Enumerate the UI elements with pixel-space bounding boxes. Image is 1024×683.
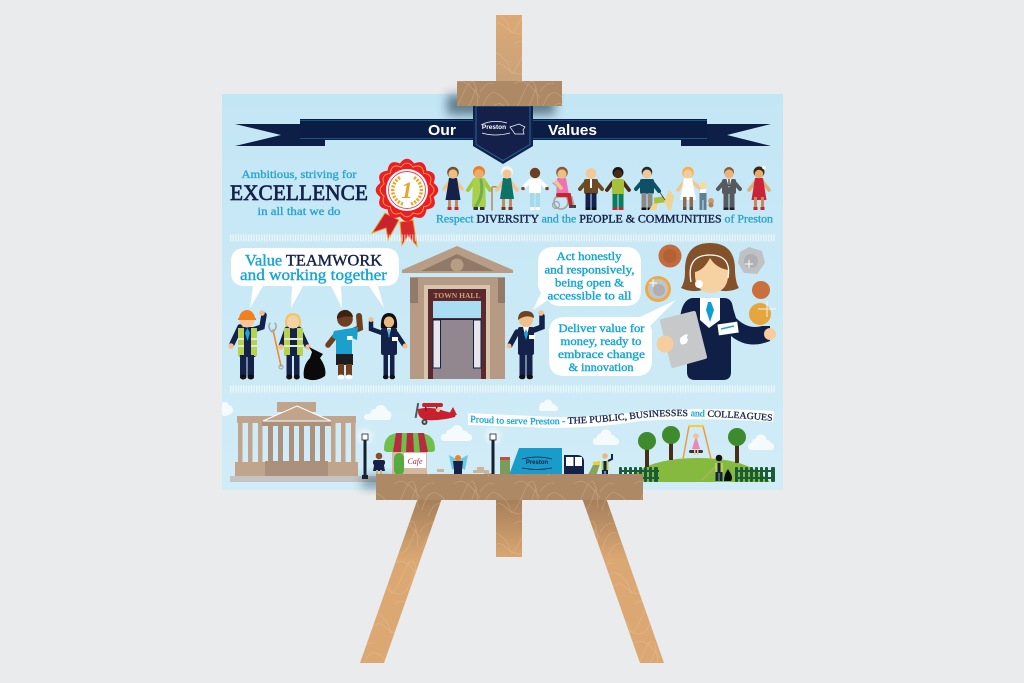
woman hand on tablet <box>656 336 674 352</box>
poster board <box>222 94 783 490</box>
banner main band <box>300 119 707 140</box>
bottom scene <box>222 400 775 482</box>
cafe shop: Cafe <box>407 457 423 466</box>
banner right tail <box>681 124 771 146</box>
park worker with bag <box>702 455 732 481</box>
easel top crossbar <box>457 81 562 106</box>
woman face <box>695 258 728 293</box>
easel: right leg <box>582 498 664 663</box>
bubble text line 2: and working together <box>240 267 388 284</box>
coin: copper small <box>752 281 770 299</box>
coin: copper large <box>658 244 682 268</box>
person: woman in green sari <box>468 166 490 210</box>
town hall sign: TOWN HALL <box>434 292 481 300</box>
person: blonde woman and child <box>678 167 714 210</box>
bubble shape <box>549 300 676 376</box>
flying ribbon: Proud to serve Preston - THE PUBLIC, BUSINESSES and COLLEAGUES <box>470 410 772 424</box>
banner word Values: Values <box>548 122 597 139</box>
banner heading: Our Values <box>235 106 771 164</box>
worker: hard hat man <box>228 310 265 380</box>
banner shield: Preston <box>482 124 506 131</box>
woman hair <box>681 243 739 291</box>
person: woman in red dress <box>749 166 769 210</box>
park hill <box>624 458 770 482</box>
speech bubble: value for money <box>549 300 676 376</box>
easel shelf <box>376 474 643 500</box>
person: woman in wheelchair <box>552 167 576 209</box>
bubble shape <box>231 248 399 308</box>
bubble text: embrace change <box>558 349 645 361</box>
cafe shop <box>384 433 435 475</box>
lamp post right <box>486 429 500 475</box>
workers group <box>228 310 408 380</box>
park trees <box>638 426 746 467</box>
crossbar shadow <box>447 95 555 115</box>
park swing <box>683 425 711 459</box>
bubble text <box>544 251 635 302</box>
woman name badge <box>717 322 739 335</box>
bubble text: Deliver value for <box>558 323 645 335</box>
easel shelf shadow <box>362 476 392 488</box>
people row: diversity <box>444 166 769 210</box>
divider bottom <box>230 386 775 392</box>
easel grain overlay <box>360 15 664 663</box>
person: man in grey suit <box>718 167 740 210</box>
rosette body: 1 <box>401 178 413 203</box>
pavement <box>230 476 380 482</box>
bubble shape <box>533 247 641 310</box>
person: woman in green top <box>607 167 629 210</box>
delivery van: Preston <box>526 460 549 466</box>
banner word Our: Our <box>428 122 456 139</box>
building: town hall <box>402 246 513 379</box>
town hall walls <box>410 277 505 379</box>
worker: man in teal t-shirt <box>328 310 360 379</box>
woman body <box>680 298 770 380</box>
street worker waving <box>602 453 612 475</box>
bubble text: Act honestly <box>556 251 622 263</box>
excellence line 3: in all that we do <box>258 206 341 218</box>
rosette tails <box>372 213 417 246</box>
person: woman in navy dress <box>444 167 462 210</box>
bricks <box>437 467 492 475</box>
worker: litter picker <box>269 313 311 380</box>
easel: left leg <box>360 498 442 663</box>
worker: woman in navy suit <box>368 313 408 379</box>
bubble text <box>558 323 645 374</box>
angel figure <box>449 455 468 474</box>
person: old lady with cane <box>492 166 517 210</box>
icon: black bin bag <box>304 347 325 380</box>
tablet <box>662 313 705 366</box>
easel: lower post <box>496 498 522 557</box>
icon: rosette with number 1 <box>372 159 438 246</box>
wheelie bin <box>500 457 510 475</box>
clouds <box>222 400 774 450</box>
banner left tail <box>235 124 325 146</box>
town hall door <box>433 319 481 379</box>
coin: bimetal <box>645 276 671 302</box>
aeroplane <box>415 403 457 425</box>
excellence line 1: Ambitious, striving for <box>242 169 357 181</box>
easel: upper post <box>496 15 522 85</box>
woman collar and tie <box>700 298 720 328</box>
speech bubble: honesty <box>533 247 641 310</box>
person: man with guide dog <box>636 167 674 210</box>
man in navy suit <box>506 310 544 379</box>
coin: gold <box>749 301 776 325</box>
easel back legs and post <box>360 15 664 663</box>
bubble text: money, ready to <box>560 336 642 348</box>
bubble text line 1: Value TEAMWORK <box>245 252 382 270</box>
wheelie bin tilted <box>588 461 600 476</box>
building: civic hall <box>235 402 358 477</box>
town hall door frame <box>428 289 486 379</box>
woman with headset and tablet <box>656 243 776 380</box>
person: boy in white shirt <box>521 168 549 210</box>
bubble text: and responsively, <box>544 264 635 276</box>
text block: excellence <box>230 169 368 218</box>
text: respect diversity: Respect DIVERSITY and the PEOPLE & COMMUNITIES of Preston <box>436 214 773 226</box>
excellence heading: EXCELLENCE <box>230 180 368 205</box>
speech bubble: teamwork <box>231 248 399 308</box>
banner shield <box>473 106 533 164</box>
town hall pilasters <box>410 278 505 379</box>
bubble text: accessible to all <box>548 290 632 302</box>
town hall window <box>433 301 481 318</box>
delivery van <box>509 448 584 475</box>
bubble text: being open & <box>555 278 624 290</box>
woman hand right <box>764 328 776 340</box>
bubble text: & innovation <box>568 362 634 374</box>
coins <box>645 244 776 325</box>
park fences <box>619 467 775 482</box>
woman on street <box>373 453 385 475</box>
person: old man in brown jacket <box>580 168 602 210</box>
town hall roof <box>402 246 513 273</box>
lamp post left <box>358 429 372 479</box>
woman headset <box>690 255 729 288</box>
divider top <box>230 234 775 242</box>
coin: silver heptagon <box>738 247 765 274</box>
